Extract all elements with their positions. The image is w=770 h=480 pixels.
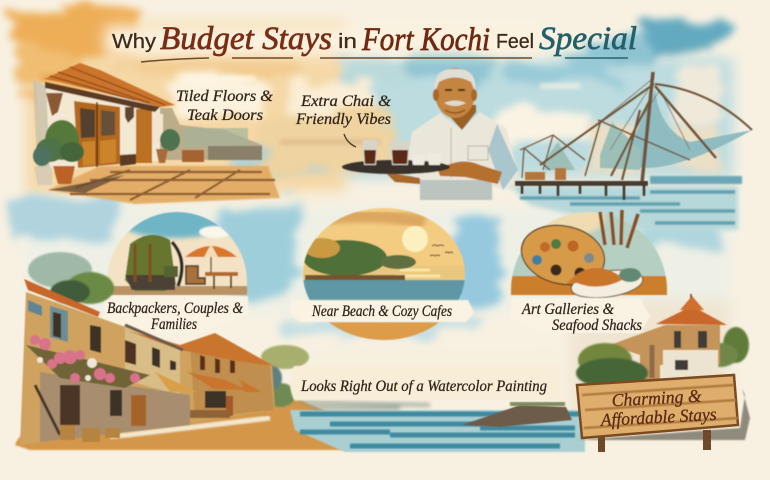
sea: [510, 176, 742, 230]
label: backpackers, couples and families: Families: [150, 316, 197, 333]
title: [112, 21, 637, 62]
illustration: smiling host with chai tray: [342, 68, 518, 200]
wooden sign: charming and affordable stays: Charming &: [611, 386, 702, 410]
label: tiled floors and teak doors: Teak Doors: [187, 107, 263, 124]
backpack: [125, 235, 182, 291]
trees: [578, 343, 632, 377]
label: art galleries and seafood shacks: Art Galleries &: [521, 301, 615, 318]
potted plants: [33, 120, 262, 185]
net poles: [520, 72, 752, 183]
windows and doors: [28, 300, 235, 426]
shirt: [405, 112, 518, 200]
title: Why: [112, 31, 156, 53]
illustration: Chinese fishing nets on the sea: [510, 72, 752, 230]
umbrella and table: [185, 244, 238, 289]
wooden sign: charming and affordable stays: [577, 375, 750, 452]
caption: looks right out of a watercolor painting: [290, 366, 560, 400]
label: backpackers, couples and families: Backpackers, Couples &: [107, 300, 243, 317]
label: near beach and cozy cafes: Near Beach & Cozy Cafes: [311, 303, 452, 320]
title: Fort Kochi: [361, 22, 490, 58]
label: extra chai and friendly vibes: Extra Chai &: [300, 93, 392, 110]
roofs: [24, 279, 274, 392]
street planters: [60, 425, 120, 442]
label: tiled floors and teak doors: Tiled Floors &: [176, 88, 274, 105]
label: art galleries and seafood shacks: [510, 298, 650, 334]
vignette: art palette and seafood: [510, 209, 668, 298]
caption: looks right out of a watercolor painting: Looks Right Out of a Watercolor Painting: [300, 378, 547, 395]
white wall: [36, 82, 165, 172]
illustration: colonial house on the right: [576, 294, 749, 388]
rocks: [462, 405, 572, 427]
large net: [627, 90, 752, 168]
side door: [136, 109, 152, 163]
head: [433, 68, 477, 118]
illustration: sea and rocks at the bottom: [290, 402, 585, 452]
label: extra chai and friendly vibes: Friendly Vibes: [295, 111, 391, 128]
walls: [20, 292, 275, 445]
label: backpackers, couples and families: [104, 296, 248, 333]
veranda paving: [48, 166, 280, 204]
title: Budget Stays: [160, 21, 332, 57]
pier: [510, 168, 650, 200]
label: tiled floors and teak doors: [176, 88, 274, 124]
label: near beach and cozy cafes: [290, 300, 474, 322]
title: in: [338, 31, 357, 53]
label: art galleries and seafood shacks: Seafood Shacks: [552, 317, 642, 334]
brushes: [600, 210, 638, 248]
tiled roof: [44, 63, 175, 112]
ground: [15, 400, 385, 452]
orange roof: [656, 294, 727, 325]
illustration: tiled veranda with teak doors: [33, 63, 280, 204]
vignette: sunset near the beach: [300, 200, 470, 342]
tray and cups: [342, 140, 450, 174]
arms: [438, 161, 502, 184]
wooden sign: charming and affordable stays: Affordable Stays: [599, 404, 717, 430]
wall lanterns: [46, 93, 63, 116]
flowering vine: [26, 335, 150, 435]
palette: [516, 218, 610, 292]
label: extra chai and friendly vibes: [295, 93, 392, 147]
vignette: backpack and cafe table: [107, 206, 247, 295]
walls: [610, 325, 720, 380]
illustration: street of heritage houses: [15, 252, 385, 452]
trees behind: [28, 252, 309, 407]
title: Feel: [496, 31, 534, 53]
title: Special: [539, 21, 637, 57]
double teak door: [74, 101, 120, 168]
plate with fish: [566, 266, 644, 302]
